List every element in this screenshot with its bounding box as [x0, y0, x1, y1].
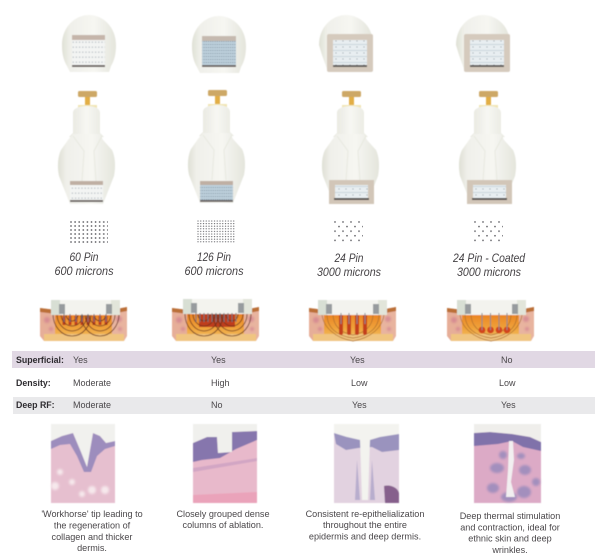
skin diagram: 60 pin — [40, 300, 127, 341]
dot pattern: 24 pin — [334, 221, 363, 243]
row: density: High — [211, 378, 230, 388]
caption: 60 pin: dermis. — [77, 543, 107, 553]
tip: 24 pin coated — [456, 15, 510, 72]
row: superficial: Superficial: — [16, 355, 64, 365]
caption: 24 pin coated: Deep thermal stimulation — [460, 511, 560, 521]
row: deep RF — [13, 397, 595, 414]
dot pattern: 60 pin — [70, 221, 108, 243]
label: 126 pin: 600 microns — [184, 264, 244, 278]
row: deep RF: Deep RF: — [16, 400, 55, 410]
handpiece: 126 pin — [188, 90, 245, 203]
dot pattern: 126 pin — [197, 220, 235, 243]
handpiece: 60 pin — [58, 91, 115, 204]
skin diagram: 126 pin — [172, 299, 259, 341]
row: density: Low — [351, 378, 368, 388]
histology: 126 pin — [193, 424, 257, 503]
caption: 60 pin: the regeneration of — [54, 520, 131, 530]
skin diagram: 24 pin coated — [447, 300, 534, 341]
label: 24 pin coated: 3000 microns — [457, 265, 521, 279]
tip: 126 pin — [192, 16, 246, 73]
skin diagram: 24 pin — [309, 300, 396, 341]
tip: 60 pin — [62, 15, 116, 72]
caption: 126 pin: Closely grouped dense — [176, 509, 270, 519]
tip: 24 pin — [319, 15, 373, 72]
caption: 126 pin: columns of ablation. — [183, 520, 263, 530]
label: 24 pin coated — [452, 251, 525, 279]
histology: 24 pin coated — [474, 424, 541, 503]
row: superficial: Yes — [211, 355, 226, 365]
row: density: Moderate — [73, 378, 111, 388]
label: 126 pin: 126 Pin — [197, 250, 231, 264]
dot pattern: 24 pin coated — [474, 221, 503, 243]
row: density: Low — [499, 378, 516, 388]
row: superficial — [12, 351, 595, 368]
row: superficial: Yes — [350, 355, 365, 365]
row: density — [16, 378, 516, 388]
handpiece: 24 pin — [322, 91, 379, 204]
caption: 24 pin coated: ethnic skin and deep — [468, 534, 552, 544]
label: 60 pin: 60 Pin — [70, 250, 99, 264]
label: 60 pin: 600 microns — [54, 264, 114, 278]
handpiece: 24 pin coated — [459, 91, 516, 204]
handpiece row — [58, 90, 516, 204]
row: superficial: Yes — [73, 355, 88, 365]
label: 24 pin — [317, 251, 381, 279]
caption: 24 pin: Consistent re-epithelialization — [306, 509, 424, 519]
caption: 24 pin: epidermis and deep dermis. — [309, 532, 421, 542]
row: superficial: No — [501, 355, 513, 365]
label: 24 pin: 24 Pin — [334, 251, 364, 265]
row: deep RF: No — [211, 400, 223, 410]
label: 24 pin coated: 24 Pin - Coated — [452, 251, 525, 265]
caption: 60 pin: 'Workhorse' tip leading to — [41, 509, 143, 519]
caption: 24 pin coated: wrinkles. — [491, 545, 528, 555]
label: 126 pin — [184, 250, 244, 278]
row: density: Density: — [16, 378, 51, 388]
row: deep RF: Yes — [501, 400, 516, 410]
label: 24 pin: 3000 microns — [317, 265, 381, 279]
histology: 60 pin — [51, 424, 115, 503]
histology: 24 pin — [334, 424, 399, 503]
caption: 24 pin coated: and contraction, ideal for — [460, 522, 560, 532]
row: deep RF: Yes — [352, 400, 367, 410]
caption: 24 pin: throughout the entire — [323, 520, 407, 530]
caption: 60 pin: collagen and thicker — [52, 532, 132, 542]
row: deep RF: Moderate — [73, 400, 111, 410]
label: 60 pin — [54, 250, 114, 278]
tip photo row — [62, 15, 510, 73]
